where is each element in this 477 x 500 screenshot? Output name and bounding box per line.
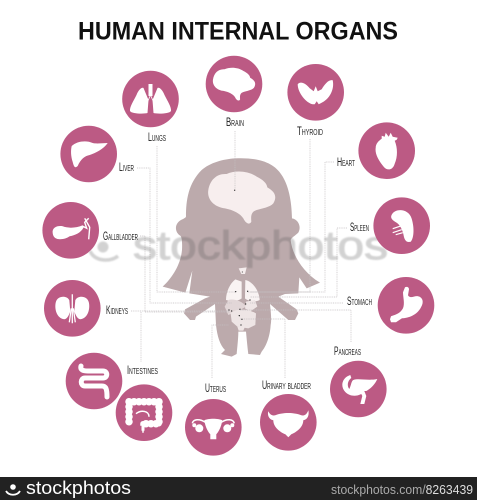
footer brand: stockphotos [26, 478, 131, 498]
label: intestines: Intestines [127, 365, 158, 377]
label: urinary bladder: Urinary bladder [262, 380, 311, 392]
icon: stomach [378, 277, 434, 334]
icon: uterus [185, 399, 242, 456]
label: uterus: Uterus [205, 383, 226, 395]
label: brain: Brain [226, 117, 244, 129]
internal organs [225, 190, 260, 331]
connector lines [131, 131, 351, 378]
label: kidneys: Kidneys [106, 305, 128, 317]
body silhouette [163, 158, 320, 357]
label: heart: Heart [337, 157, 355, 169]
label: spleen: Spleen [350, 222, 369, 234]
icon: gallbladder [42, 202, 99, 259]
brain in body [208, 171, 275, 224]
label: gallbladder: Gallbladder [103, 231, 138, 243]
footer bar [0, 477, 477, 500]
icon: urinary bladder [260, 394, 317, 451]
icon: large intestine [116, 384, 172, 441]
icon: pancreas [330, 361, 387, 417]
title: HUMAN INTERNAL ORGANS [78, 18, 398, 46]
watermark: stockphotos [133, 224, 388, 268]
icon: heart [358, 122, 415, 179]
icon: liver [60, 126, 117, 182]
label: liver: Liver [119, 162, 134, 174]
icon: lungs [122, 71, 179, 127]
label: lungs: Lungs [148, 132, 166, 144]
label: stomach: Stomach [347, 296, 372, 308]
footer logo [6, 484, 20, 495]
icon: brain [206, 56, 262, 112]
footer url: stockphotos.com/8263439 [331, 483, 473, 497]
label: pancreas: Pancreas [334, 346, 361, 358]
icon: spleen [373, 197, 430, 254]
icon: kidneys [44, 280, 101, 337]
label: thyroid: Thyroid [297, 126, 323, 138]
icon: thyroid [287, 64, 344, 121]
icon: small intestine [66, 353, 122, 409]
